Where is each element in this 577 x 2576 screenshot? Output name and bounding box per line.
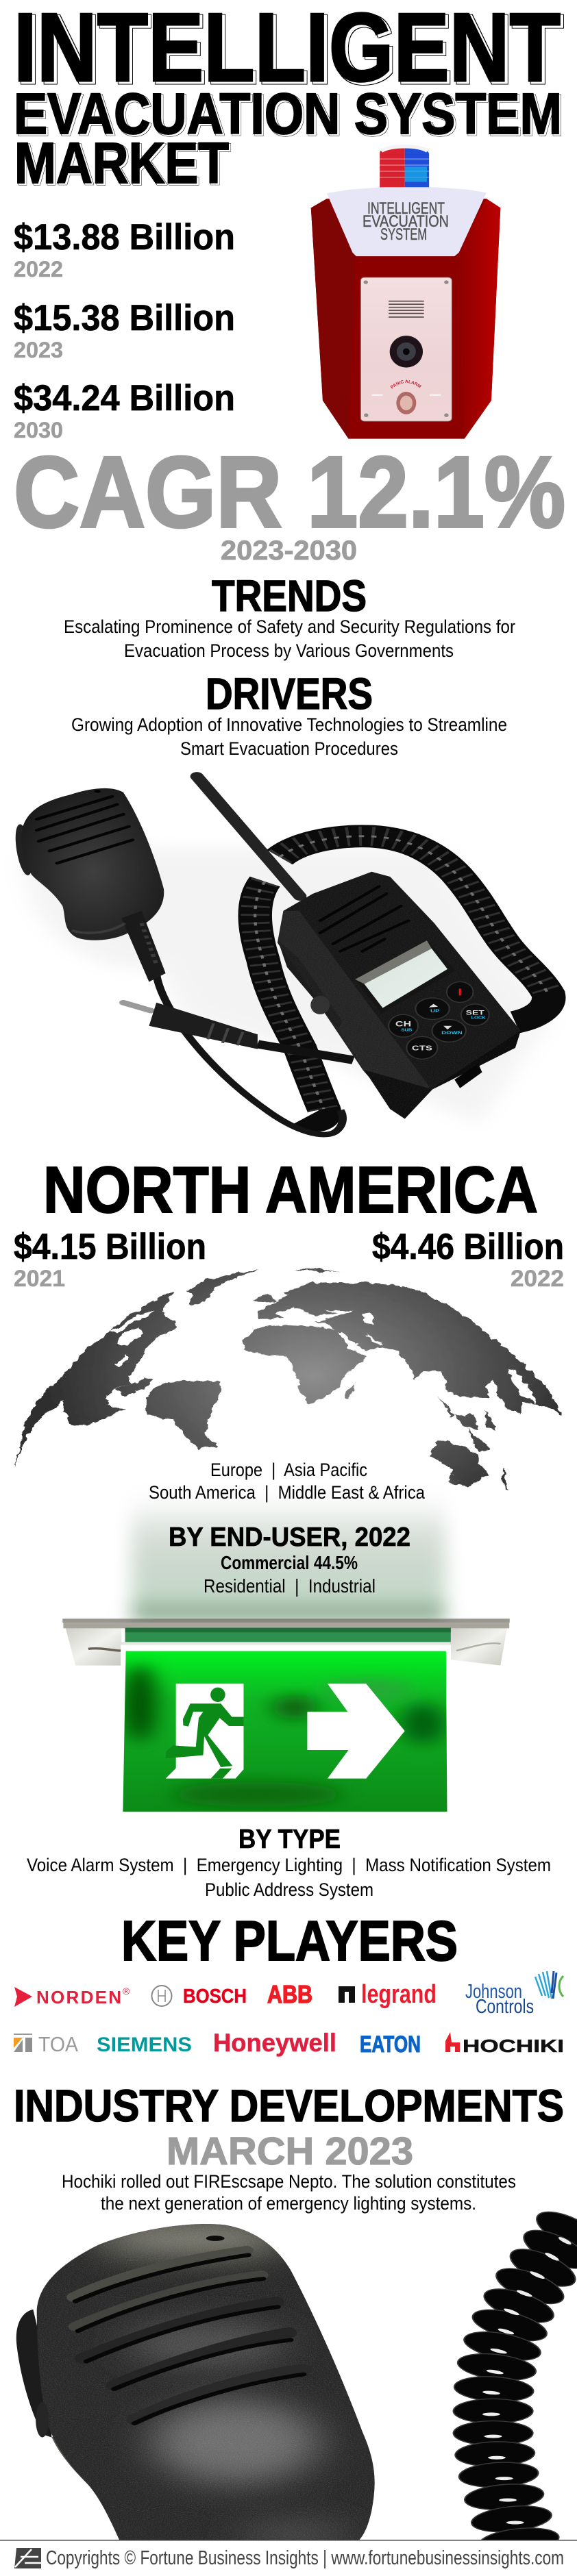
logo: Hochiki: HOCHIKI (463, 2036, 564, 2056)
microphone (12, 824, 35, 876)
logo: Norden: ® (123, 1986, 130, 1997)
image: green emergency exit sign (62, 1618, 510, 1818)
other regions list (149, 1460, 426, 1503)
logo: Johnson Controls: Controls (476, 1996, 534, 2018)
keypad: UP (430, 1009, 440, 1014)
radio body (278, 872, 521, 1118)
market values: 2023 (14, 338, 63, 362)
trends section (64, 571, 515, 661)
North America value 2021: 2021 (14, 1266, 65, 1292)
icon: red evacuation alarm unit: SYSTEM (380, 225, 427, 244)
development date: MARCH 2023 (167, 2129, 413, 2173)
end-user segment: Residential | Industrial (204, 1575, 376, 1597)
development description: the next generation of emergency lighting systems. (101, 2193, 476, 2214)
market values: $34.24 Billion (14, 378, 235, 418)
type segment (27, 1825, 551, 1900)
end-user segment (169, 1523, 410, 1597)
market values: $13.88 Billion (14, 217, 235, 258)
trends section: Evacuation Process by Various Governments (124, 640, 454, 661)
logo: Bosch: BOSCH (183, 1986, 247, 2008)
type segment: Public Address System (205, 1879, 373, 1900)
drivers section: DRIVERS (206, 669, 373, 718)
icon: red evacuation alarm unit: EVACUATION (363, 212, 449, 231)
logo: Siemens: SIEMENS (97, 2034, 192, 2056)
drivers section (71, 669, 507, 759)
market values: $15.38 Billion (14, 298, 235, 338)
footer divider (0, 2540, 577, 2541)
logo: Legrand (339, 1980, 437, 2009)
North America value 2022 (372, 1227, 564, 1292)
logo: Norden: NORDEN (36, 1987, 121, 2008)
light glow above exit sign (132, 1488, 445, 1620)
market values: 2022 (14, 257, 63, 282)
icon: red evacuation alarm unit (311, 145, 500, 439)
key players heading: KEY PLAYERS (121, 1909, 458, 1973)
keypad: SUB (401, 1029, 413, 1032)
development description: Hochiki rolled out FIREscsape Nepto. The solution constitutes (62, 2171, 516, 2192)
icon: red evacuation alarm unit: PANIC ALARM (391, 379, 421, 389)
direction arrow (307, 1684, 405, 1779)
trends section: TRENDS (212, 571, 367, 621)
logo: Bosch (152, 1986, 247, 2008)
North America value 2021: $4.15 Billion (14, 1227, 206, 1267)
antenna (197, 777, 300, 896)
exit door with running figure (166, 1684, 243, 1779)
logo: Honeywell: Honeywell (213, 2029, 336, 2057)
title: MARKET (14, 131, 229, 195)
image: world map globe (14, 1268, 564, 1491)
other regions list: South America | Middle East & Africa (149, 1482, 426, 1503)
market values: 2030 (14, 418, 63, 442)
type segment: BY TYPE (238, 1825, 341, 1854)
keypad: CH (395, 1020, 411, 1028)
thin cable (156, 975, 343, 1134)
coil cord left (255, 881, 324, 1121)
coil cord right (156, 836, 549, 1134)
LCD screen (355, 940, 456, 1014)
drivers section: Smart Evacuation Procedures (180, 738, 398, 759)
end-user segment: BY END-USER, 2022 (169, 1523, 410, 1552)
logo: Hochiki (445, 2032, 564, 2056)
coil cord (452, 2205, 577, 2558)
market values (14, 217, 235, 442)
logo: Johnson Controls (465, 1971, 563, 2018)
development description (62, 2171, 516, 2214)
keypad: CTS (412, 1044, 432, 1052)
keypad: DOWN (441, 1031, 463, 1036)
plug (123, 1003, 151, 1011)
other regions list: Europe | Asia Pacific (210, 1460, 367, 1480)
map water cut-outs (110, 1308, 537, 1403)
North America value 2021 (14, 1227, 206, 1292)
title (14, 0, 562, 195)
North America value 2022: 2022 (511, 1266, 564, 1292)
logo: ABB: ABB (267, 1980, 312, 2008)
logo: Legrand: legrand (361, 1980, 437, 2009)
logo: Eaton: EATON (360, 2031, 421, 2058)
keypad: LOCK (471, 1016, 486, 1020)
CAGR period: 2023-2030 (221, 536, 357, 566)
logo: Johnson Controls: Johnson (465, 1981, 522, 2003)
logo: Norden (14, 1986, 130, 2008)
drivers section: Growing Adoption of Innovative Technologies to Streamline (71, 714, 507, 735)
logo: TOA (14, 2032, 78, 2056)
keypad: SET (466, 1009, 485, 1016)
footer logo (14, 2548, 41, 2568)
logo: TOA: TOA (38, 2032, 78, 2056)
end-user segment: Commercial 44.5% (221, 1552, 358, 1573)
icon: red evacuation alarm unit: INTELLIGENT (367, 199, 445, 218)
image: close-up speaker microphone and coil cord (16, 2205, 577, 2558)
image: two-way radio with speaker microphone (12, 777, 552, 1134)
trends section: Escalating Prominence of Safety and Security Regulations for (64, 616, 515, 637)
keypad (389, 981, 489, 1059)
